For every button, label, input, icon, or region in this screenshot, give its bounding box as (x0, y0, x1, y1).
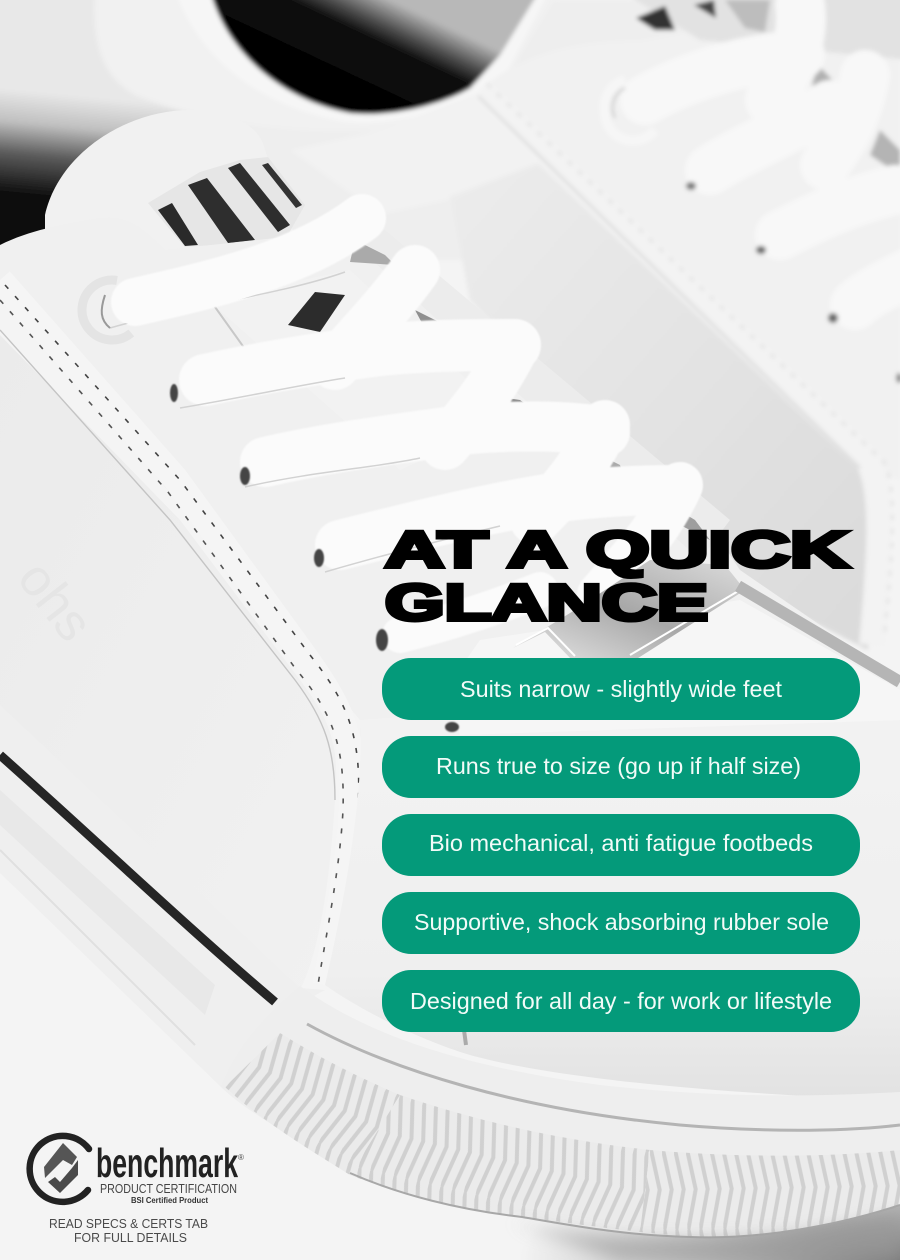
pill: footbeds (382, 814, 860, 876)
pill: sizing (382, 736, 860, 798)
far laces (645, 5, 900, 305)
tongue strip under laces (208, 230, 730, 560)
black sole stripe (0, 755, 275, 1002)
title: GLANCE (385, 574, 708, 631)
icon: hexagon mark (44, 1143, 78, 1193)
suede edge (738, 586, 900, 682)
stitched edge band (0, 280, 359, 985)
near shoe quarter panel (0, 335, 336, 990)
certified line: BSI Certified Product (131, 1196, 208, 1205)
far shoe, out of focus (0, 0, 900, 650)
sole left band (0, 705, 325, 1087)
striped logo patch (148, 157, 305, 247)
lower sole (350, 1173, 900, 1237)
footnote (49, 1217, 208, 1245)
pill: all day (382, 970, 860, 1032)
pill: fit (382, 658, 860, 720)
lace holes (170, 384, 459, 732)
subtitle: PRODUCT CERTIFICATION (100, 1182, 237, 1196)
near shoe heel tab (45, 110, 300, 290)
near laces (135, 218, 680, 635)
pill: footbeds: Bio mechanical, anti fatigue footbeds (429, 830, 813, 856)
footnote: FOR FULL DETAILS (74, 1231, 187, 1245)
pill: sole: Supportive, shock absorbing rubber sole (414, 909, 829, 935)
far eyelet (605, 80, 655, 141)
title: AT A QUICK (385, 521, 849, 578)
registered mark: ® (238, 1153, 244, 1162)
pill: fit: Suits narrow - slightly wide feet (460, 676, 782, 702)
tread pattern (225, 1033, 900, 1237)
certification logo (30, 1136, 244, 1205)
embossed brand mark: ohs (6, 550, 104, 652)
far stripes (636, 6, 675, 30)
icon: C ring (30, 1136, 89, 1202)
foxing groove (307, 1024, 900, 1130)
pill: sole (382, 892, 860, 954)
near shoe eyestay (0, 218, 900, 1100)
eyelet (70, 218, 362, 352)
pill: all day: Designed for all day - for work or lifestyle (410, 988, 832, 1014)
title (385, 521, 849, 631)
rubber foxing (221, 986, 900, 1237)
list of features (382, 658, 860, 1032)
pill: sizing: Runs true to size (go up if half size) (436, 753, 801, 779)
footnote: READ SPECS & CERTS TAB (49, 1217, 208, 1231)
wordmark: benchmark (96, 1140, 238, 1186)
metal lace tag (513, 560, 745, 660)
right vamp (325, 680, 900, 1100)
